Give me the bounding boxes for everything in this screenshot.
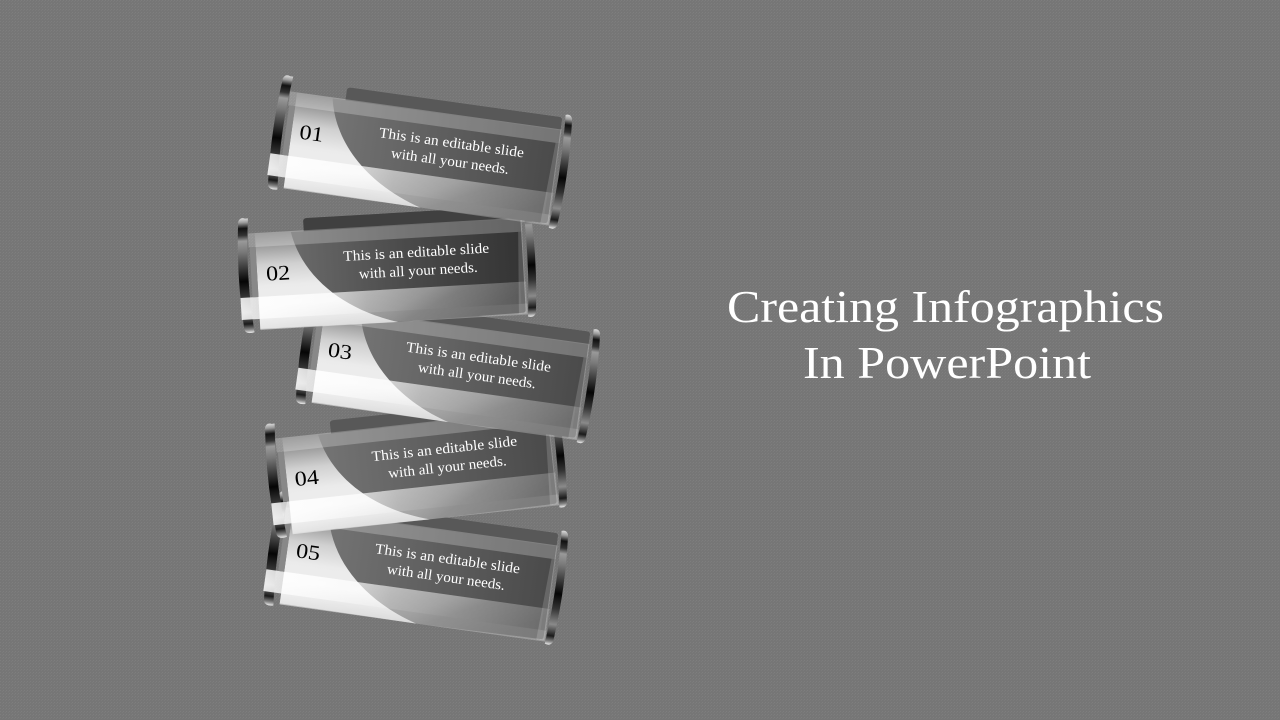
dark panel bbox=[319, 85, 562, 225]
glass top band bbox=[284, 507, 558, 559]
glass bottom strip bbox=[260, 303, 528, 330]
glass lower reflection bbox=[258, 282, 528, 330]
right cap bbox=[549, 114, 575, 230]
panel top strip bbox=[341, 503, 558, 546]
right cap bbox=[545, 530, 571, 646]
glass lower band bbox=[295, 368, 576, 428]
description bbox=[343, 241, 491, 283]
title: In PowerPoint bbox=[803, 337, 1091, 388]
white glass section bbox=[312, 307, 462, 422]
description: This is an editable slide bbox=[378, 125, 525, 161]
left cap bbox=[261, 490, 289, 606]
glass side strip bbox=[250, 247, 258, 297]
dark panel bbox=[315, 501, 558, 641]
glass top band bbox=[316, 306, 590, 358]
left cap bbox=[265, 74, 293, 190]
scroll banner 01 bbox=[265, 74, 575, 230]
glass lower reflection bbox=[289, 472, 559, 534]
glass lower band bbox=[271, 473, 552, 525]
glass right edge bbox=[540, 142, 560, 225]
description bbox=[376, 125, 525, 180]
description: This is an editable slide bbox=[405, 340, 552, 376]
description: This is an editable slide bbox=[343, 241, 490, 265]
glass lower band bbox=[263, 569, 544, 630]
glass right edge bbox=[514, 232, 527, 314]
description: with all your needs. bbox=[386, 562, 506, 594]
glass side strip bbox=[310, 320, 323, 370]
white glass section bbox=[282, 423, 430, 534]
glass bottom strip bbox=[292, 494, 559, 534]
description: This is an editable slide bbox=[371, 433, 518, 465]
number: 01 bbox=[298, 120, 325, 147]
number: 03 bbox=[327, 337, 354, 365]
title bbox=[727, 281, 1164, 388]
description: This is an editable slide bbox=[374, 541, 521, 577]
white glass section bbox=[284, 92, 434, 208]
scroll banner 03 bbox=[293, 289, 603, 444]
scroll banner 02 bbox=[235, 201, 539, 334]
right cap bbox=[577, 329, 603, 444]
panel top strip bbox=[303, 206, 520, 231]
description bbox=[372, 541, 521, 596]
description: with all your needs. bbox=[390, 146, 510, 178]
right cap bbox=[521, 201, 539, 317]
glass lower band bbox=[241, 282, 521, 320]
glass bottom strip bbox=[312, 392, 579, 440]
glass bottom strip bbox=[280, 593, 547, 642]
glass right edge bbox=[536, 558, 556, 641]
glass right edge bbox=[541, 423, 558, 505]
glass top band bbox=[288, 91, 562, 143]
panel top strip bbox=[345, 87, 562, 130]
left cap bbox=[235, 218, 255, 334]
glass top band bbox=[275, 409, 549, 452]
title: Creating Infographics bbox=[727, 281, 1164, 332]
white glass section bbox=[255, 225, 398, 330]
number: 04 bbox=[293, 465, 320, 491]
panel top strip bbox=[330, 397, 547, 433]
description: with all your needs. bbox=[387, 453, 507, 482]
dark panel bbox=[317, 397, 557, 530]
glass lower reflection bbox=[312, 370, 582, 440]
glass side strip bbox=[278, 452, 289, 502]
glass bottom strip bbox=[284, 177, 551, 226]
dark panel bbox=[347, 300, 590, 440]
glass right edge bbox=[568, 357, 588, 439]
scroll banner 05 bbox=[261, 490, 571, 646]
glass lower reflection bbox=[284, 156, 554, 226]
description bbox=[403, 340, 552, 394]
left cap bbox=[262, 423, 287, 539]
description: with all your needs. bbox=[358, 260, 478, 283]
number: 05 bbox=[295, 538, 322, 565]
number: 02 bbox=[265, 260, 291, 286]
left cap bbox=[293, 289, 321, 405]
glass side strip bbox=[282, 105, 295, 156]
glass side strip bbox=[278, 521, 291, 572]
panel top strip bbox=[373, 302, 590, 345]
glass lower band bbox=[267, 153, 548, 214]
glass top band bbox=[248, 218, 522, 247]
scroll banner 04 bbox=[262, 392, 570, 539]
right cap bbox=[547, 392, 570, 508]
dark panel bbox=[290, 206, 526, 328]
white glass section bbox=[280, 508, 430, 624]
glass lower reflection bbox=[280, 572, 550, 642]
description: with all your needs. bbox=[417, 360, 537, 392]
description bbox=[371, 433, 520, 484]
